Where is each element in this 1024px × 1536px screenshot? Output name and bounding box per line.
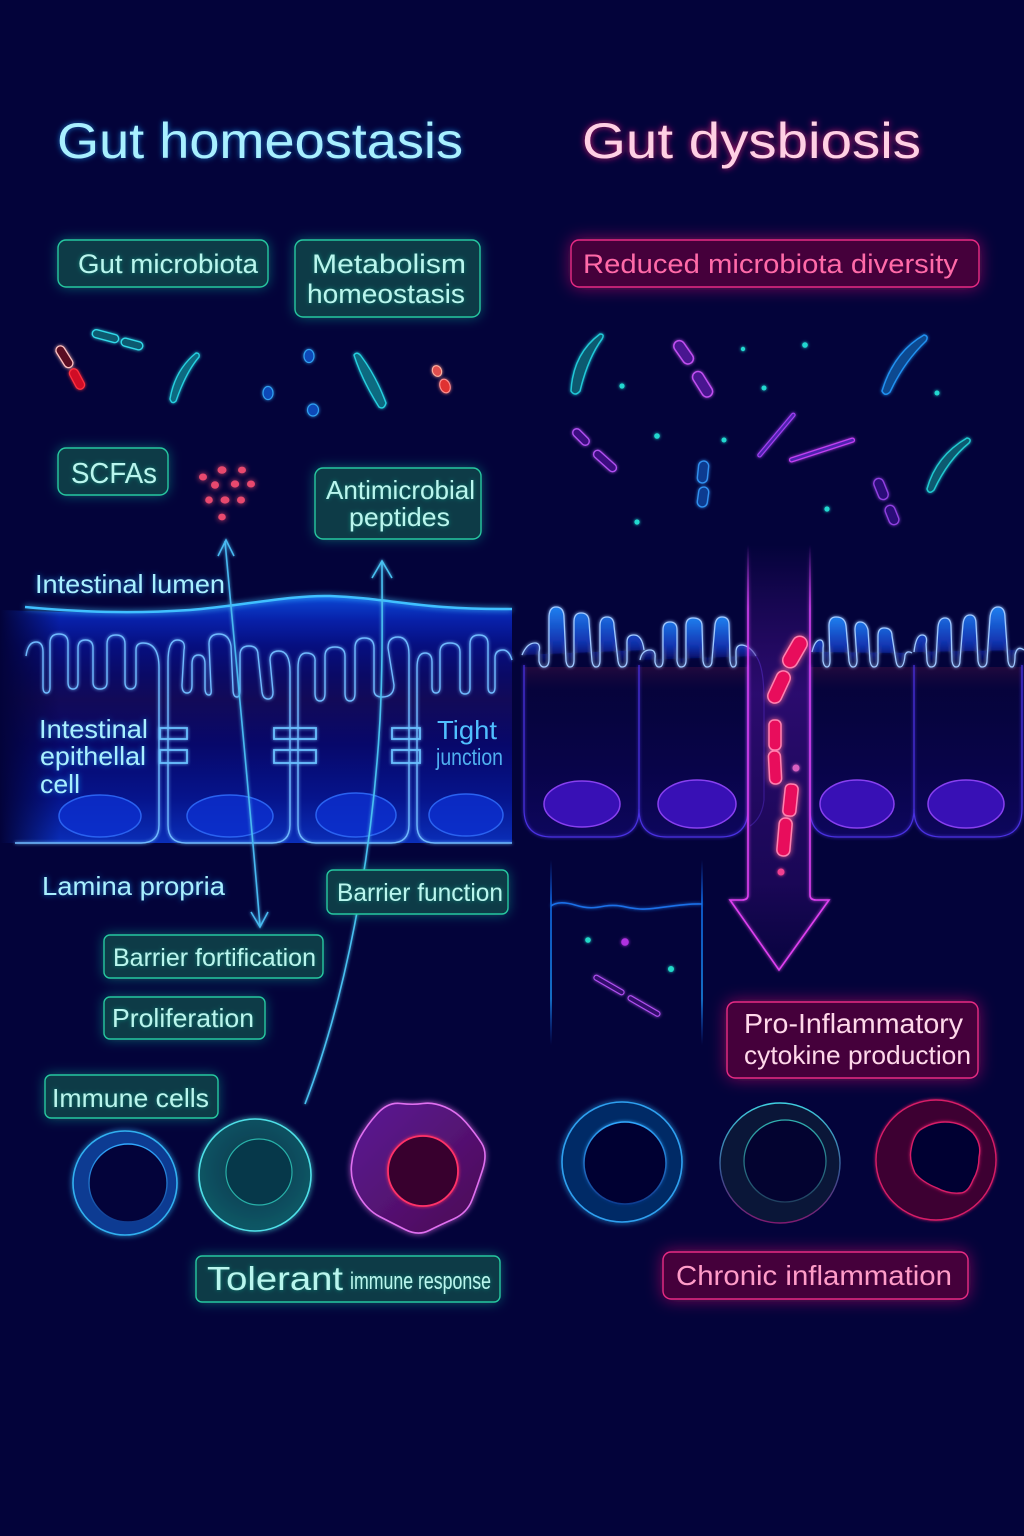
- inset particles and rods: [585, 937, 674, 1017]
- SCFA particles: [199, 466, 255, 520]
- title: Gut homeostasis: Gut homeostasis: [57, 113, 463, 169]
- lumen surface: [25, 596, 512, 612]
- enterocytes: [15, 634, 512, 843]
- center divider: [512, 150, 514, 1110]
- label: Metabolism homeostasis: homeostasis: [307, 279, 465, 309]
- label: Intestinal epithelial cell: epithellal: [40, 741, 146, 771]
- panel: damaged epithelium: [522, 607, 1024, 837]
- label: Intestinal epithelial cell: [39, 714, 148, 799]
- label: Tolerant immune response: immune response: [350, 1268, 491, 1295]
- label: Barrier fortification: Barrier fortification: [113, 944, 316, 972]
- label: Barrier function: [327, 870, 508, 914]
- icon: activated macrophage: [351, 1103, 485, 1233]
- label: Barrier function: Barrier function: [337, 879, 503, 907]
- bacteria: translocating pathogens: [765, 634, 810, 857]
- label: Reduced microbiota diversity: [571, 240, 979, 287]
- lumen and tissue band: [0, 596, 512, 843]
- label: Tight junction: junction: [435, 744, 503, 770]
- label: Metabolism homeostasis: [295, 240, 480, 317]
- label: Proliferation: Proliferation: [112, 1003, 254, 1033]
- label: Reduced microbiota diversity: Reduced microbiota diversity: [583, 249, 959, 279]
- label: Immune cells: [45, 1075, 218, 1118]
- title: Gut dysbiosis: Gut dysbiosis: [582, 113, 921, 169]
- panel: healthy epithelium: [0, 590, 512, 846]
- arrow: SCFA bidirectional: [218, 540, 268, 927]
- label: Antimicrobial peptides: [315, 468, 481, 539]
- label: Tight junction: Tight: [437, 715, 498, 745]
- label: Pro-Inflammatory cytokine production: cytokine production: [744, 1040, 971, 1070]
- label: Antimicrobial peptides: Antimicrobial: [326, 475, 475, 505]
- icon: blue immune cell, dysbiosis: [562, 1102, 682, 1222]
- label: Tolerant immune response: [196, 1256, 500, 1302]
- cell outlines: [524, 665, 1022, 837]
- label: Intestinal epithelial cell: Intestinal: [39, 714, 148, 744]
- bacteria: healthy microbiota: [54, 329, 452, 416]
- cell bodies: [524, 667, 1022, 837]
- label: SCFAs: SCFAs: [71, 458, 157, 490]
- nuclei: [544, 780, 1004, 828]
- label: Chronic inflammation: Chronic inflammation: [676, 1260, 952, 1291]
- nuclei: [59, 793, 503, 837]
- label: SCFAs: [58, 448, 168, 495]
- bacteria: dysbiotic microbiota: [571, 334, 970, 526]
- label: Gut microbiota: [58, 240, 268, 287]
- arrow: barrier breach: [730, 545, 829, 970]
- label: Antimicrobial peptides: peptides: [349, 502, 450, 532]
- particles: pathogen debris: [778, 764, 800, 876]
- label: Intestinal epithelial cell: cell: [40, 769, 80, 799]
- right wall fragment: [750, 656, 764, 826]
- label: Tolerant immune response: Tolerant: [207, 1260, 343, 1297]
- panel: lamina propria inset: [551, 860, 702, 1045]
- tight junctions: [160, 728, 420, 763]
- label: Proliferation: [104, 997, 265, 1039]
- label: Chronic inflammation: [663, 1252, 968, 1299]
- villi: [522, 607, 1024, 667]
- label: Pro-Inflammatory cytokine production: Pro-Inflammatory: [744, 1008, 963, 1039]
- icon: fading immune cell, dysbiosis: [720, 1103, 840, 1223]
- icon: inflamed immune cell, dysbiosis: [876, 1100, 996, 1220]
- label: Barrier fortification: [104, 935, 323, 978]
- label: Pro-Inflammatory cytokine production: [727, 1002, 978, 1078]
- label: Tight junction: [435, 715, 503, 770]
- label: Intestinal lumen: Intestinal lumen: [35, 569, 225, 599]
- icon: teal immune cell: [199, 1119, 311, 1231]
- arrow: immune to antimicrobial peptides: [305, 561, 392, 1104]
- icon: blue immune cell: [73, 1131, 177, 1235]
- label: Lamina propria: Lamina propria: [42, 871, 226, 901]
- label: Gut microbiota: Gut microbiota: [78, 249, 259, 279]
- label: Metabolism homeostasis: Metabolism: [312, 249, 466, 279]
- label: Immune cells: Immune cells: [52, 1083, 209, 1113]
